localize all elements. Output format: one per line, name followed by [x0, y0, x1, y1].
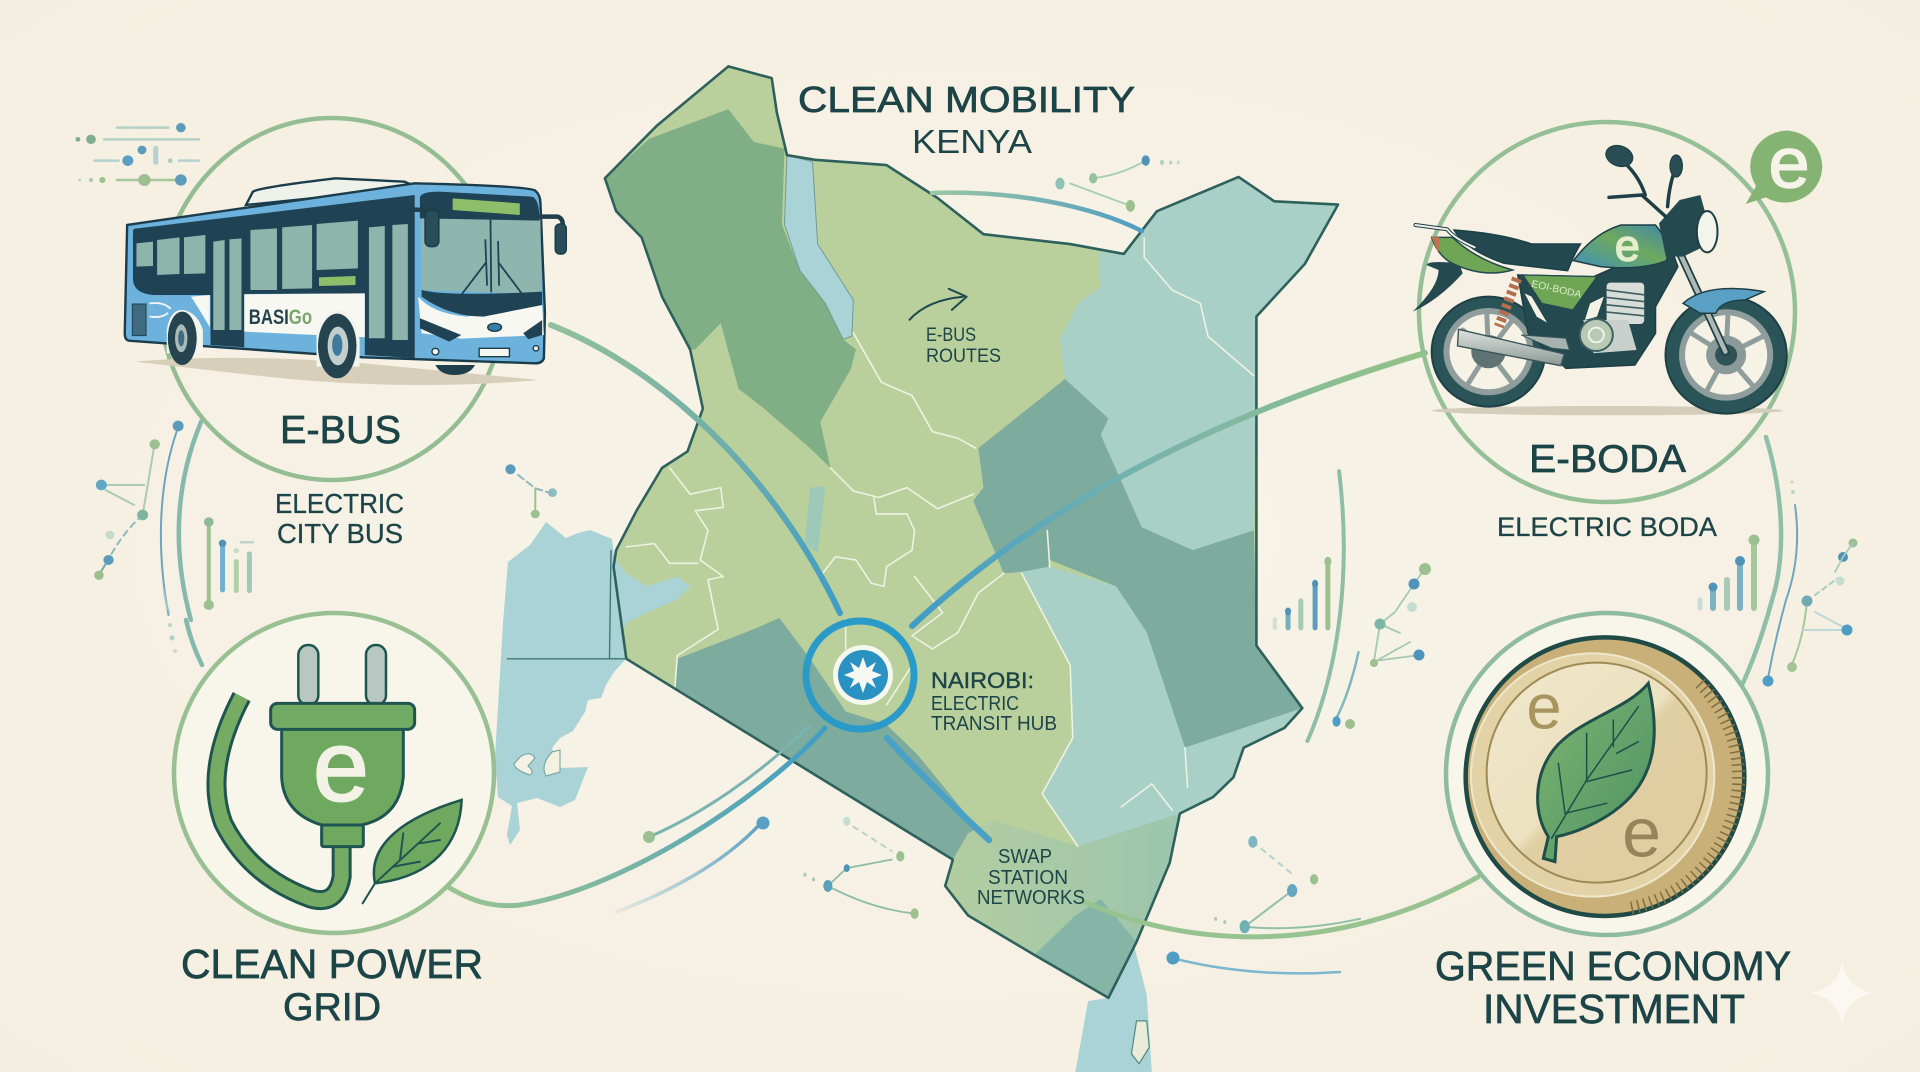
network deco: below map right [1214, 836, 1360, 933]
lake border line [507, 550, 626, 659]
bike frame [1518, 243, 1678, 368]
label: e-boda: E-BODA [1529, 438, 1686, 481]
label: green economy investment [1435, 943, 1791, 1032]
coin edge [1466, 637, 1744, 916]
bus body [125, 183, 545, 363]
connector: hub to swap stations [887, 738, 989, 840]
bus dash [422, 290, 542, 317]
panel: e-boda ring [1419, 122, 1795, 502]
bus lights and plate [420, 318, 461, 342]
label: electric city bus: ELECTRIC [275, 488, 404, 519]
arcs deco: right side [1743, 437, 1858, 686]
map label: swap stations: SWAP [998, 846, 1052, 868]
arcs and network deco: left side [75, 123, 557, 620]
map outline stroke [605, 66, 1338, 998]
network deco: above map [1055, 155, 1180, 212]
bus mirrors [411, 209, 563, 225]
bike front wheel [1666, 296, 1787, 414]
bus electric swoosh [150, 303, 170, 317]
network deco: below map centre [803, 817, 919, 919]
connector: top arc [932, 193, 1142, 231]
plug cable [216, 697, 342, 900]
arc deco: left lower [164, 590, 202, 665]
region: pale teal northeast [1060, 177, 1338, 550]
network deco: between map and coin [1345, 563, 1431, 729]
bike panel label: EOI-BODA [1530, 279, 1583, 301]
panel: green economy ring [1446, 613, 1768, 935]
label: green economy investment: GREEN ECONOMY [1435, 943, 1791, 989]
connector: thin green branch [643, 725, 810, 843]
bus front white [418, 297, 544, 339]
connector: lower thin blue arc [1166, 952, 1340, 973]
bike tank [1574, 225, 1668, 268]
label: electric boda: ELECTRIC BODA [1497, 512, 1717, 542]
label: green economy investment: INVESTMENT [1483, 986, 1745, 1032]
map label: Nairobi hub: ELECTRIC [931, 693, 1019, 715]
bike tail [1432, 237, 1513, 273]
hub marker: Nairobi [806, 621, 914, 729]
bus destination sign [453, 198, 520, 215]
title: CLEAN MOBILITY [798, 79, 1135, 120]
region: pale teal tana river [1022, 567, 1213, 846]
coastal water strip south [1075, 945, 1152, 1072]
plug logo: e [313, 711, 369, 823]
bike shadow [1432, 406, 1783, 415]
bike exhaust [1457, 329, 1564, 366]
bus brand: BASIGo [249, 304, 312, 329]
bike tank logo: e [1615, 222, 1640, 270]
icon: speech-bubble e badge [1746, 123, 1822, 204]
bike rack [1415, 225, 1475, 247]
plug prongs [298, 645, 318, 705]
bus under chassis [435, 365, 475, 375]
subtitle: KENYA [912, 123, 1032, 160]
lake victoria and neighbouring water [495, 522, 626, 845]
plug cap [271, 703, 415, 729]
bus side sign [319, 276, 355, 286]
watermark sparkle [1810, 961, 1874, 1025]
map label: swap stations: NETWORKS [977, 887, 1085, 909]
connector: e-bus to Nairobi [551, 325, 840, 613]
connector: swap stations to green economy [1085, 877, 1478, 937]
region: kwale teal [1034, 899, 1137, 998]
bike side panel [1523, 275, 1597, 310]
bus front wheel [317, 310, 360, 378]
bar deco: right of map [1275, 471, 1358, 741]
map: Kenya counties [507, 66, 1338, 1072]
label: clean power grid: GRID [283, 986, 381, 1029]
bus windscreen [421, 218, 541, 293]
leaf on coin [1538, 683, 1654, 862]
icon: electric motorcycle [1413, 142, 1787, 415]
map label: Nairobi hub: TRANSIT HUB [931, 713, 1057, 735]
small leaf [363, 800, 462, 903]
coin inner disc [1487, 663, 1707, 883]
bus windows [136, 221, 408, 340]
bus wipers and pillar [456, 220, 527, 302]
icon: leaf coin [1466, 637, 1744, 916]
bus shadow [134, 358, 539, 385]
map label: e-bus routes: ROUTES [926, 346, 1001, 367]
region: coast corner [1185, 708, 1302, 797]
region: dark teal south [675, 618, 994, 860]
label: electric city bus: CITY BUS [277, 518, 403, 549]
bus cab top [420, 192, 539, 221]
bus rear wheel [167, 310, 203, 365]
label: e-bus: E-BUS [280, 409, 401, 452]
bike fork [1668, 227, 1725, 352]
connector: e-boda to Nairobi [912, 353, 1425, 626]
coastal island [1131, 1021, 1149, 1064]
bike headlight [1659, 195, 1705, 257]
icon: electric city bus [125, 178, 566, 385]
map label: Nairobi hub: NAIROBI: [931, 668, 1034, 693]
icon: speech-bubble e badge: e [1769, 123, 1810, 203]
panel: e-bus ring [160, 118, 504, 480]
bus roof unit [246, 178, 418, 205]
rift lake [805, 486, 825, 553]
winam gulf [614, 557, 690, 659]
county borders [626, 237, 1254, 846]
icon: plug with cable and leaf [216, 645, 462, 903]
label: clean power grid [181, 941, 483, 1029]
bike front fender [1683, 288, 1764, 313]
bus white panel [244, 293, 365, 337]
region: dark green northwest [605, 109, 856, 468]
bus dark band [133, 195, 415, 358]
connector: thin blue branch [616, 816, 770, 912]
region: lake turkana [784, 155, 853, 340]
plug body [282, 728, 403, 825]
bike rear wheel [1432, 297, 1545, 407]
bike shock [1499, 278, 1517, 327]
icon: leaf coin: e [1622, 794, 1661, 872]
label: electric city bus [275, 488, 404, 549]
arrow: e-bus routes [909, 289, 967, 320]
bike rear fender [1413, 262, 1463, 312]
map label: e-bus routes: E-BUS [926, 325, 976, 346]
bike handlebars and mirrors [1609, 158, 1676, 217]
map label: e-bus routes [926, 325, 1001, 367]
map label: Nairobi hub [931, 668, 1057, 735]
coin face [1471, 653, 1714, 897]
region: dark teal east [973, 379, 1302, 748]
map label: swap stations [977, 846, 1085, 909]
bike side window cuts [1525, 293, 1604, 323]
region: coast green [945, 814, 1180, 998]
connector: clean power grid to Nairobi [448, 728, 825, 906]
bike seat [1454, 230, 1580, 271]
map label: swap stations: STATION [988, 867, 1068, 889]
coin e marks: e [1526, 672, 1562, 742]
map base outline [605, 66, 1338, 998]
panel: clean power ring [174, 613, 494, 933]
label: clean power grid: CLEAN POWER [181, 941, 483, 987]
chart deco: right bars [1700, 534, 1760, 608]
bike engine [1580, 282, 1645, 353]
